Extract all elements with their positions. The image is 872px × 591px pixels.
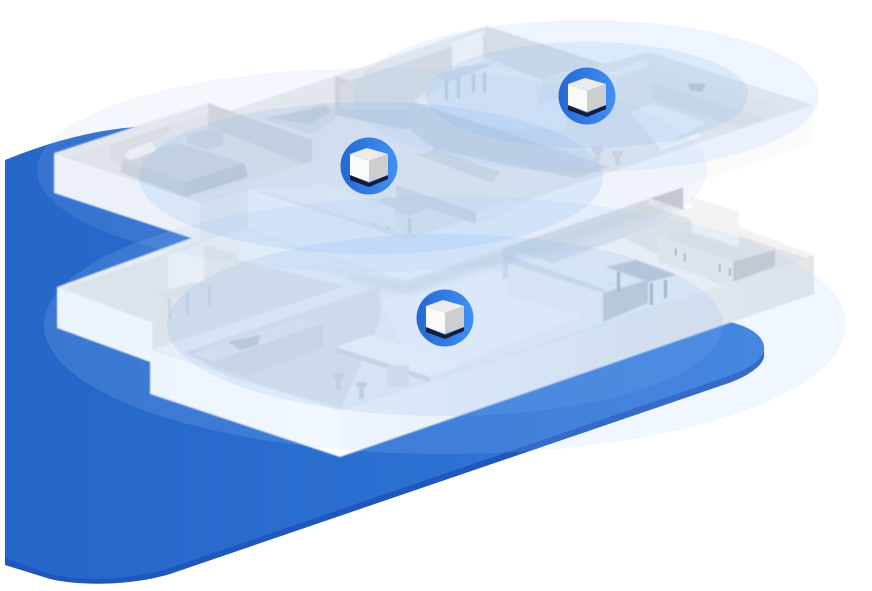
blue base shape [5,127,764,584]
router badge: top [558,68,616,124]
bathtub [265,103,335,134]
stools [333,373,367,399]
coverage: top inner [426,42,748,148]
coverage: lower outer [44,196,846,454]
coffee table lower [606,260,676,305]
upper room partition [248,185,406,232]
lower floor shadow [300,190,683,295]
lower floor rooms [64,187,814,410]
upper floor slabs [54,105,813,280]
dining table white [335,335,462,387]
kitchen counter [185,318,323,376]
lower floor [57,187,814,457]
router badge: middle [340,138,398,194]
upper kitchen [530,58,781,152]
lower floor slab [57,255,814,457]
router badge: bottom [416,290,474,346]
coverage: top outer [353,20,819,172]
wifi coverage rings [37,20,846,454]
coverage: middle inner [139,102,603,254]
divider wall by dining table [168,243,204,296]
upper floor inner wall [408,100,610,180]
bedroom partition wall [208,103,312,168]
lower floor surface [57,190,814,410]
coffee table upper [370,196,428,234]
upper living room floor [250,128,575,232]
cabinet and tv [658,197,775,283]
bedroom floor [66,113,312,197]
coverage: lower inner [167,234,723,416]
upper floor surface [54,26,813,240]
coverage: middle outer [37,68,707,272]
upper floor [54,26,813,280]
dining table left [155,280,226,318]
bed [110,125,248,197]
stools upper [592,147,623,165]
bathroom wall [335,76,408,130]
upper dining area [340,26,604,130]
partition box [237,228,350,287]
sofa lower [508,252,648,322]
sofa upper [395,150,515,224]
